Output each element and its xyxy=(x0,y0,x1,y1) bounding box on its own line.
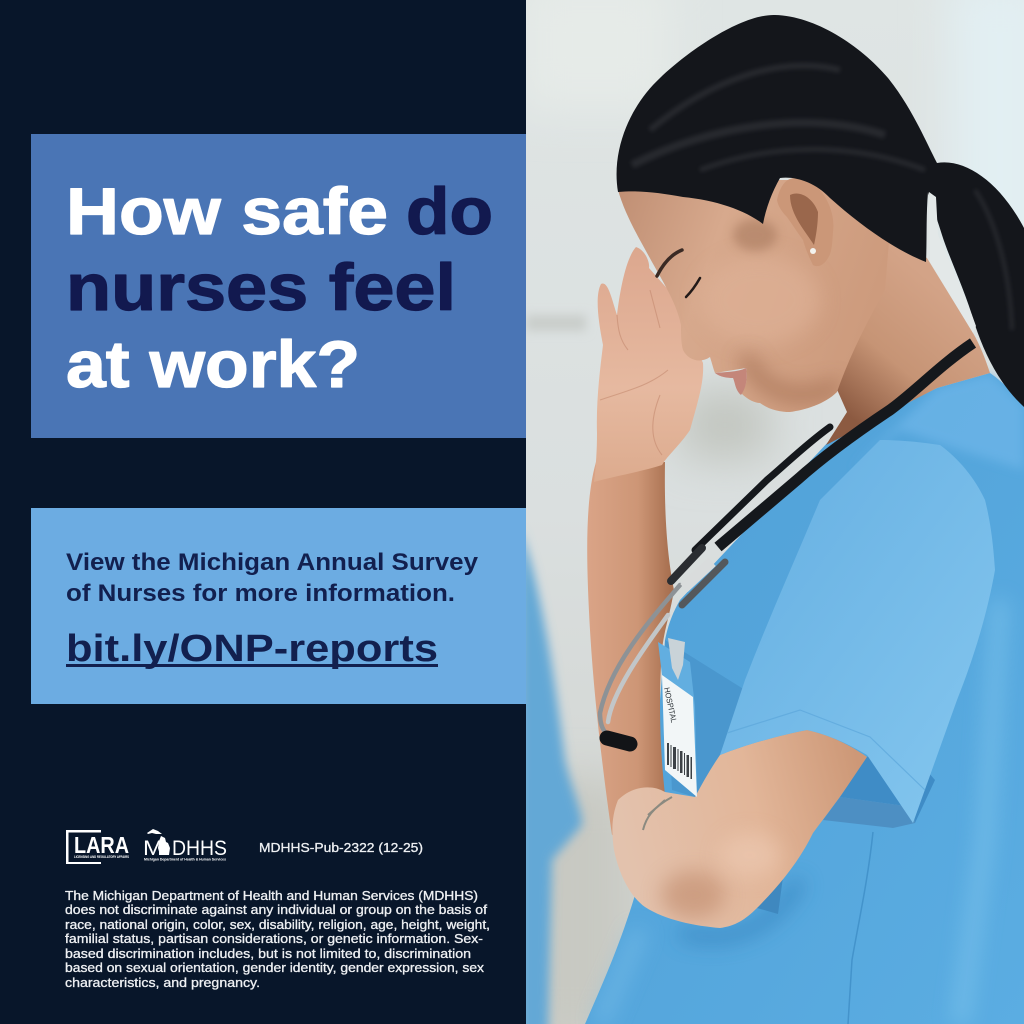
logo: LARA: LICENSING AND REGULATORY AFFAIRS xyxy=(74,855,130,859)
stethoscope xyxy=(600,343,973,744)
text: survey invitation: of Nurses for more information. xyxy=(66,580,455,607)
upright forearm xyxy=(587,462,674,835)
logo: MDHHS: M xyxy=(143,837,163,860)
logo: LARA xyxy=(66,830,130,864)
nurse figure xyxy=(585,15,1024,1024)
closed eye xyxy=(686,278,700,297)
title: How safe do nurses feel at work?: How safe xyxy=(66,174,388,248)
face xyxy=(618,180,890,412)
logo: MDHHS xyxy=(143,829,227,862)
title: How safe do nurses feel at work?: do xyxy=(406,174,493,248)
ID badge: HOSPITAL xyxy=(662,687,678,724)
panel: title box xyxy=(31,134,526,438)
lips xyxy=(715,368,747,395)
crossed arm xyxy=(612,730,867,928)
title: How safe do nurses feel at work? xyxy=(66,174,493,401)
title: How safe do nurses feel at work?: nurses feel xyxy=(66,250,456,324)
logo: MDHHS: Michigan Department of Health & Human Services xyxy=(144,858,226,862)
text: non-discrimination statement: The Michigan Department of Health and Human Services (MDHHS) xyxy=(65,889,478,903)
tattoo xyxy=(643,797,672,830)
ear and earring xyxy=(777,178,833,266)
hand on temple xyxy=(594,247,703,482)
text: non-discrimination statement: familial status, partisan considerations, or genetic information. Sex- xyxy=(65,932,483,946)
eyebrow xyxy=(657,250,682,276)
text: non-discrimination statement: race, national origin, color, sex, disability, religion, age, height, weight, xyxy=(65,918,490,932)
text: non-discrimination statement xyxy=(65,889,490,990)
hair xyxy=(617,15,1024,407)
text: non-discrimination statement: based discrimination includes, but is not limited to, discrimination xyxy=(65,947,471,961)
scrub pocket flap xyxy=(757,877,783,914)
text: non-discrimination statement: characteristics, and pregnancy. xyxy=(65,976,260,990)
ID badge xyxy=(658,638,697,797)
text: non-discrimination statement: does not discriminate against any individual or group on the basis of xyxy=(65,903,488,917)
scrub top xyxy=(585,373,1024,1024)
panel: navy left background xyxy=(0,0,526,1024)
gap between neck and ponytail xyxy=(929,192,976,333)
text: survey invitation: View the Michigan Annual Survey xyxy=(66,549,478,576)
neck xyxy=(826,243,990,445)
link: bit.ly/ONP-reports: bit.ly/ONP-reports xyxy=(66,628,438,670)
photo: nurse with head lowered in a hospital corridor xyxy=(520,0,1024,1024)
logo: MDHHS: DHHS xyxy=(172,837,227,860)
text: publication number: MDHHS-Pub-2322 (12-25) xyxy=(259,841,423,855)
logo: LARA: LARA xyxy=(74,832,129,858)
text: survey invitation xyxy=(66,549,478,607)
text: non-discrimination statement: based on sexual orientation, gender identity, gender expression, sex xyxy=(65,961,485,975)
sleeve xyxy=(720,440,995,823)
scrub folds xyxy=(600,600,1000,1024)
panel: call to action box xyxy=(31,508,526,704)
under-sleeve shadow and chest pocket hem xyxy=(823,756,935,828)
title: How safe do nurses feel at work?: at work? xyxy=(66,327,360,401)
